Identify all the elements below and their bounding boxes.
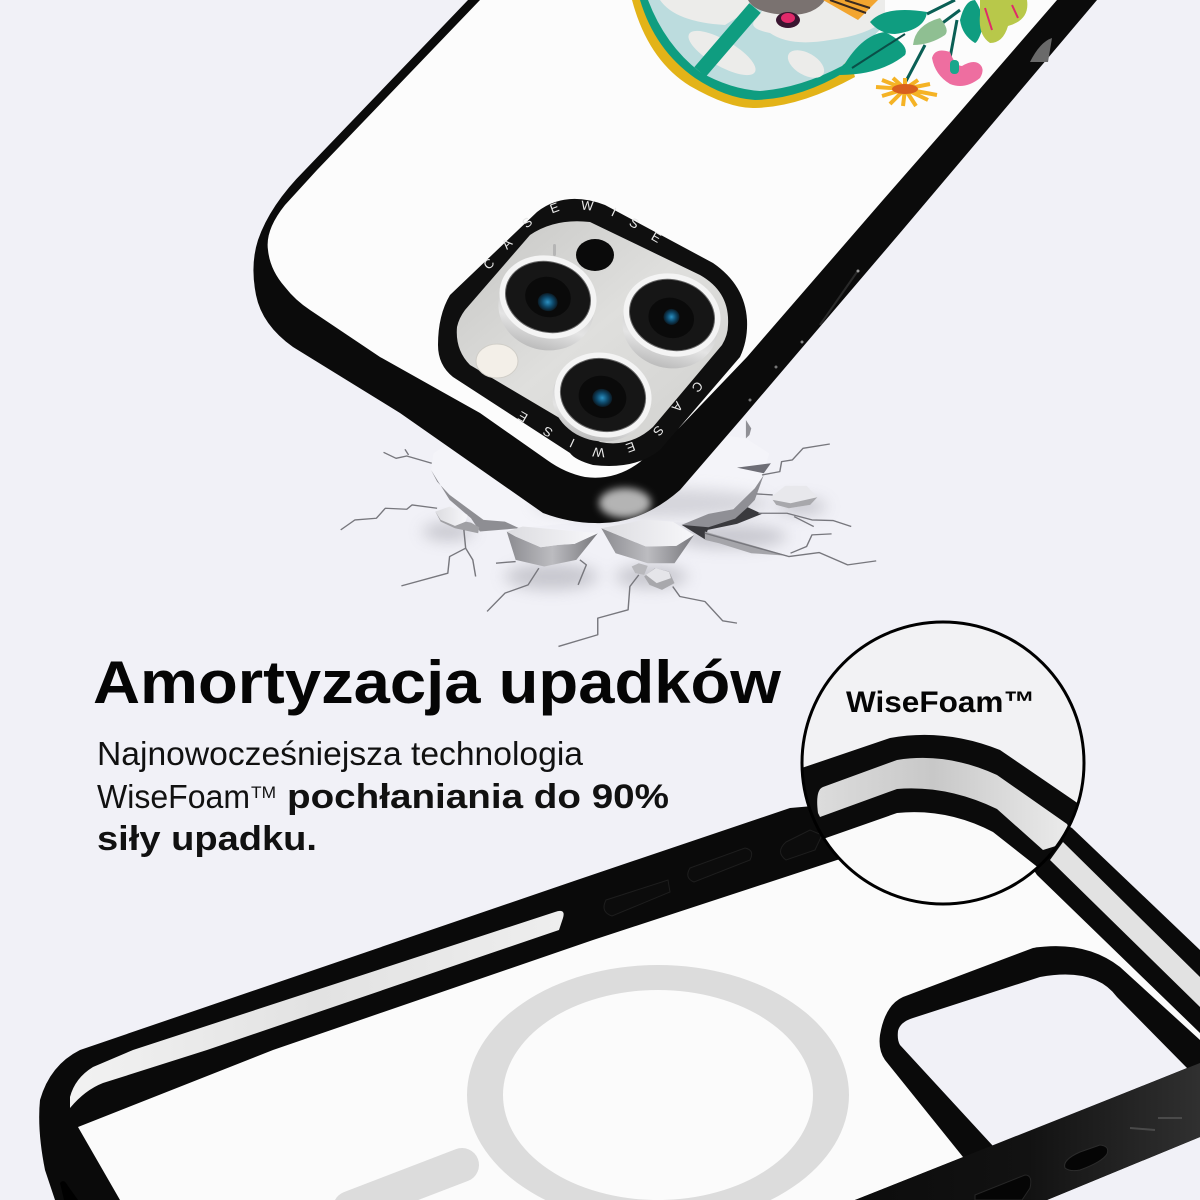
rock centre-right <box>601 520 694 563</box>
CASEWISE ring lettering top: I <box>609 204 619 219</box>
CASEWISE ring lettering bottom: S <box>540 423 555 441</box>
lens 1 <box>490 245 606 349</box>
upper phone: case frame <box>253 0 1097 523</box>
CASEWISE ring lettering bottom: C <box>689 378 706 395</box>
leaves and stems <box>840 0 1027 83</box>
lens barrels <box>489 255 727 452</box>
flash <box>476 344 518 378</box>
lens 3 <box>545 342 661 448</box>
lens 2 <box>614 263 730 367</box>
CASEWISE ring lettering top <box>480 198 664 272</box>
CASEWISE ring lettering top: C <box>480 255 497 272</box>
CASEWISE ring lettering bottom: A <box>669 399 686 415</box>
lower phone: charging port hole <box>60 1181 78 1200</box>
creature <box>748 0 825 28</box>
CASEWISE ring lettering bottom: E <box>515 408 530 426</box>
raised wall plate <box>431 420 769 528</box>
lower phone: left side slot <box>70 911 564 1108</box>
artwork: illustration on phone back <box>632 0 1027 108</box>
cutout frame <box>880 946 1200 1157</box>
CASEWISE ring lettering top: E <box>548 199 561 216</box>
upper phone: side button marks <box>748 38 1052 402</box>
lidar sensor <box>576 239 614 271</box>
CASEWISE ring lettering bottom: E <box>624 439 637 456</box>
metal camera plate <box>457 221 728 443</box>
camera module <box>438 198 747 466</box>
CASEWISE ring lettering top: S <box>519 214 536 231</box>
body text: pochłaniania do 90% <box>287 778 669 816</box>
body text <box>97 735 669 858</box>
magnified case detail <box>804 734 1077 866</box>
CASEWISE ring lettering bottom: S <box>650 423 667 439</box>
teal stem <box>700 8 755 72</box>
CASEWISE ring lettering top: E <box>649 228 664 246</box>
pink flower <box>932 50 983 86</box>
lower phone: clear back <box>78 820 1200 1200</box>
magnified foam gap <box>817 758 1075 850</box>
rock right <box>771 486 817 508</box>
magnifier label: WiseFoam™ <box>846 686 1035 719</box>
soft shadows around the crater <box>423 498 826 590</box>
magnified clear back <box>790 800 1100 920</box>
body text: TM <box>251 783 276 802</box>
yellow flower <box>876 78 937 106</box>
body text: WiseFoam <box>97 778 250 815</box>
CASEWISE ring lettering bottom <box>515 378 706 460</box>
shading under the phone <box>533 488 769 518</box>
dark crack gap <box>682 507 762 539</box>
magnifier fill <box>802 622 1084 904</box>
CASEWISE ring lettering top: S <box>627 214 642 232</box>
CASEWISE ring lettering top: A <box>498 235 515 252</box>
crack lines <box>341 444 876 646</box>
lower phone: case frame <box>39 790 1200 1200</box>
orange striped object <box>823 0 878 20</box>
WiseFoam magnifier callout <box>800 620 1086 906</box>
CASEWISE ring lettering bottom: W <box>591 444 605 460</box>
CASEWISE ring lettering top: W <box>581 198 595 214</box>
camera cutout <box>880 946 1200 1157</box>
speaker port <box>1065 1145 1108 1171</box>
rock centre-left <box>507 527 598 567</box>
right lower slab <box>705 532 789 556</box>
shard and triangle chip <box>737 420 771 473</box>
magsafe alignment pill <box>350 1165 462 1200</box>
rail grip marks <box>1130 1118 1182 1130</box>
magnified black bands <box>804 734 1077 866</box>
body text: Najnowocześniejsza technologia <box>97 735 584 772</box>
heading: Amortyzacja upadków <box>93 649 781 716</box>
cutout opening <box>898 974 1187 1146</box>
body text: siły upadku. <box>97 820 317 858</box>
upper phone: corner glare <box>599 488 651 518</box>
cracked wall impact <box>341 420 876 646</box>
small rocks below <box>632 563 675 590</box>
magsafe ring <box>467 965 849 1200</box>
CASEWISE ring lettering bottom: I <box>567 436 577 451</box>
clouds <box>660 0 885 84</box>
upper phone: white back <box>268 0 1057 478</box>
rail button <box>975 1175 1031 1200</box>
plate left rim <box>431 470 519 532</box>
microphone slit <box>553 244 556 256</box>
lower phone: side buttons <box>604 830 822 916</box>
teal ring <box>640 0 845 100</box>
lower phone: bottom rail <box>855 1063 1200 1200</box>
rock left <box>435 507 479 533</box>
plate right rim <box>682 475 764 530</box>
light blue disc <box>648 0 885 91</box>
magnifier ring <box>802 622 1084 904</box>
black camera bumper <box>438 199 747 466</box>
lower phone: right side slot <box>1050 842 1200 1007</box>
yellow rim <box>632 0 855 108</box>
